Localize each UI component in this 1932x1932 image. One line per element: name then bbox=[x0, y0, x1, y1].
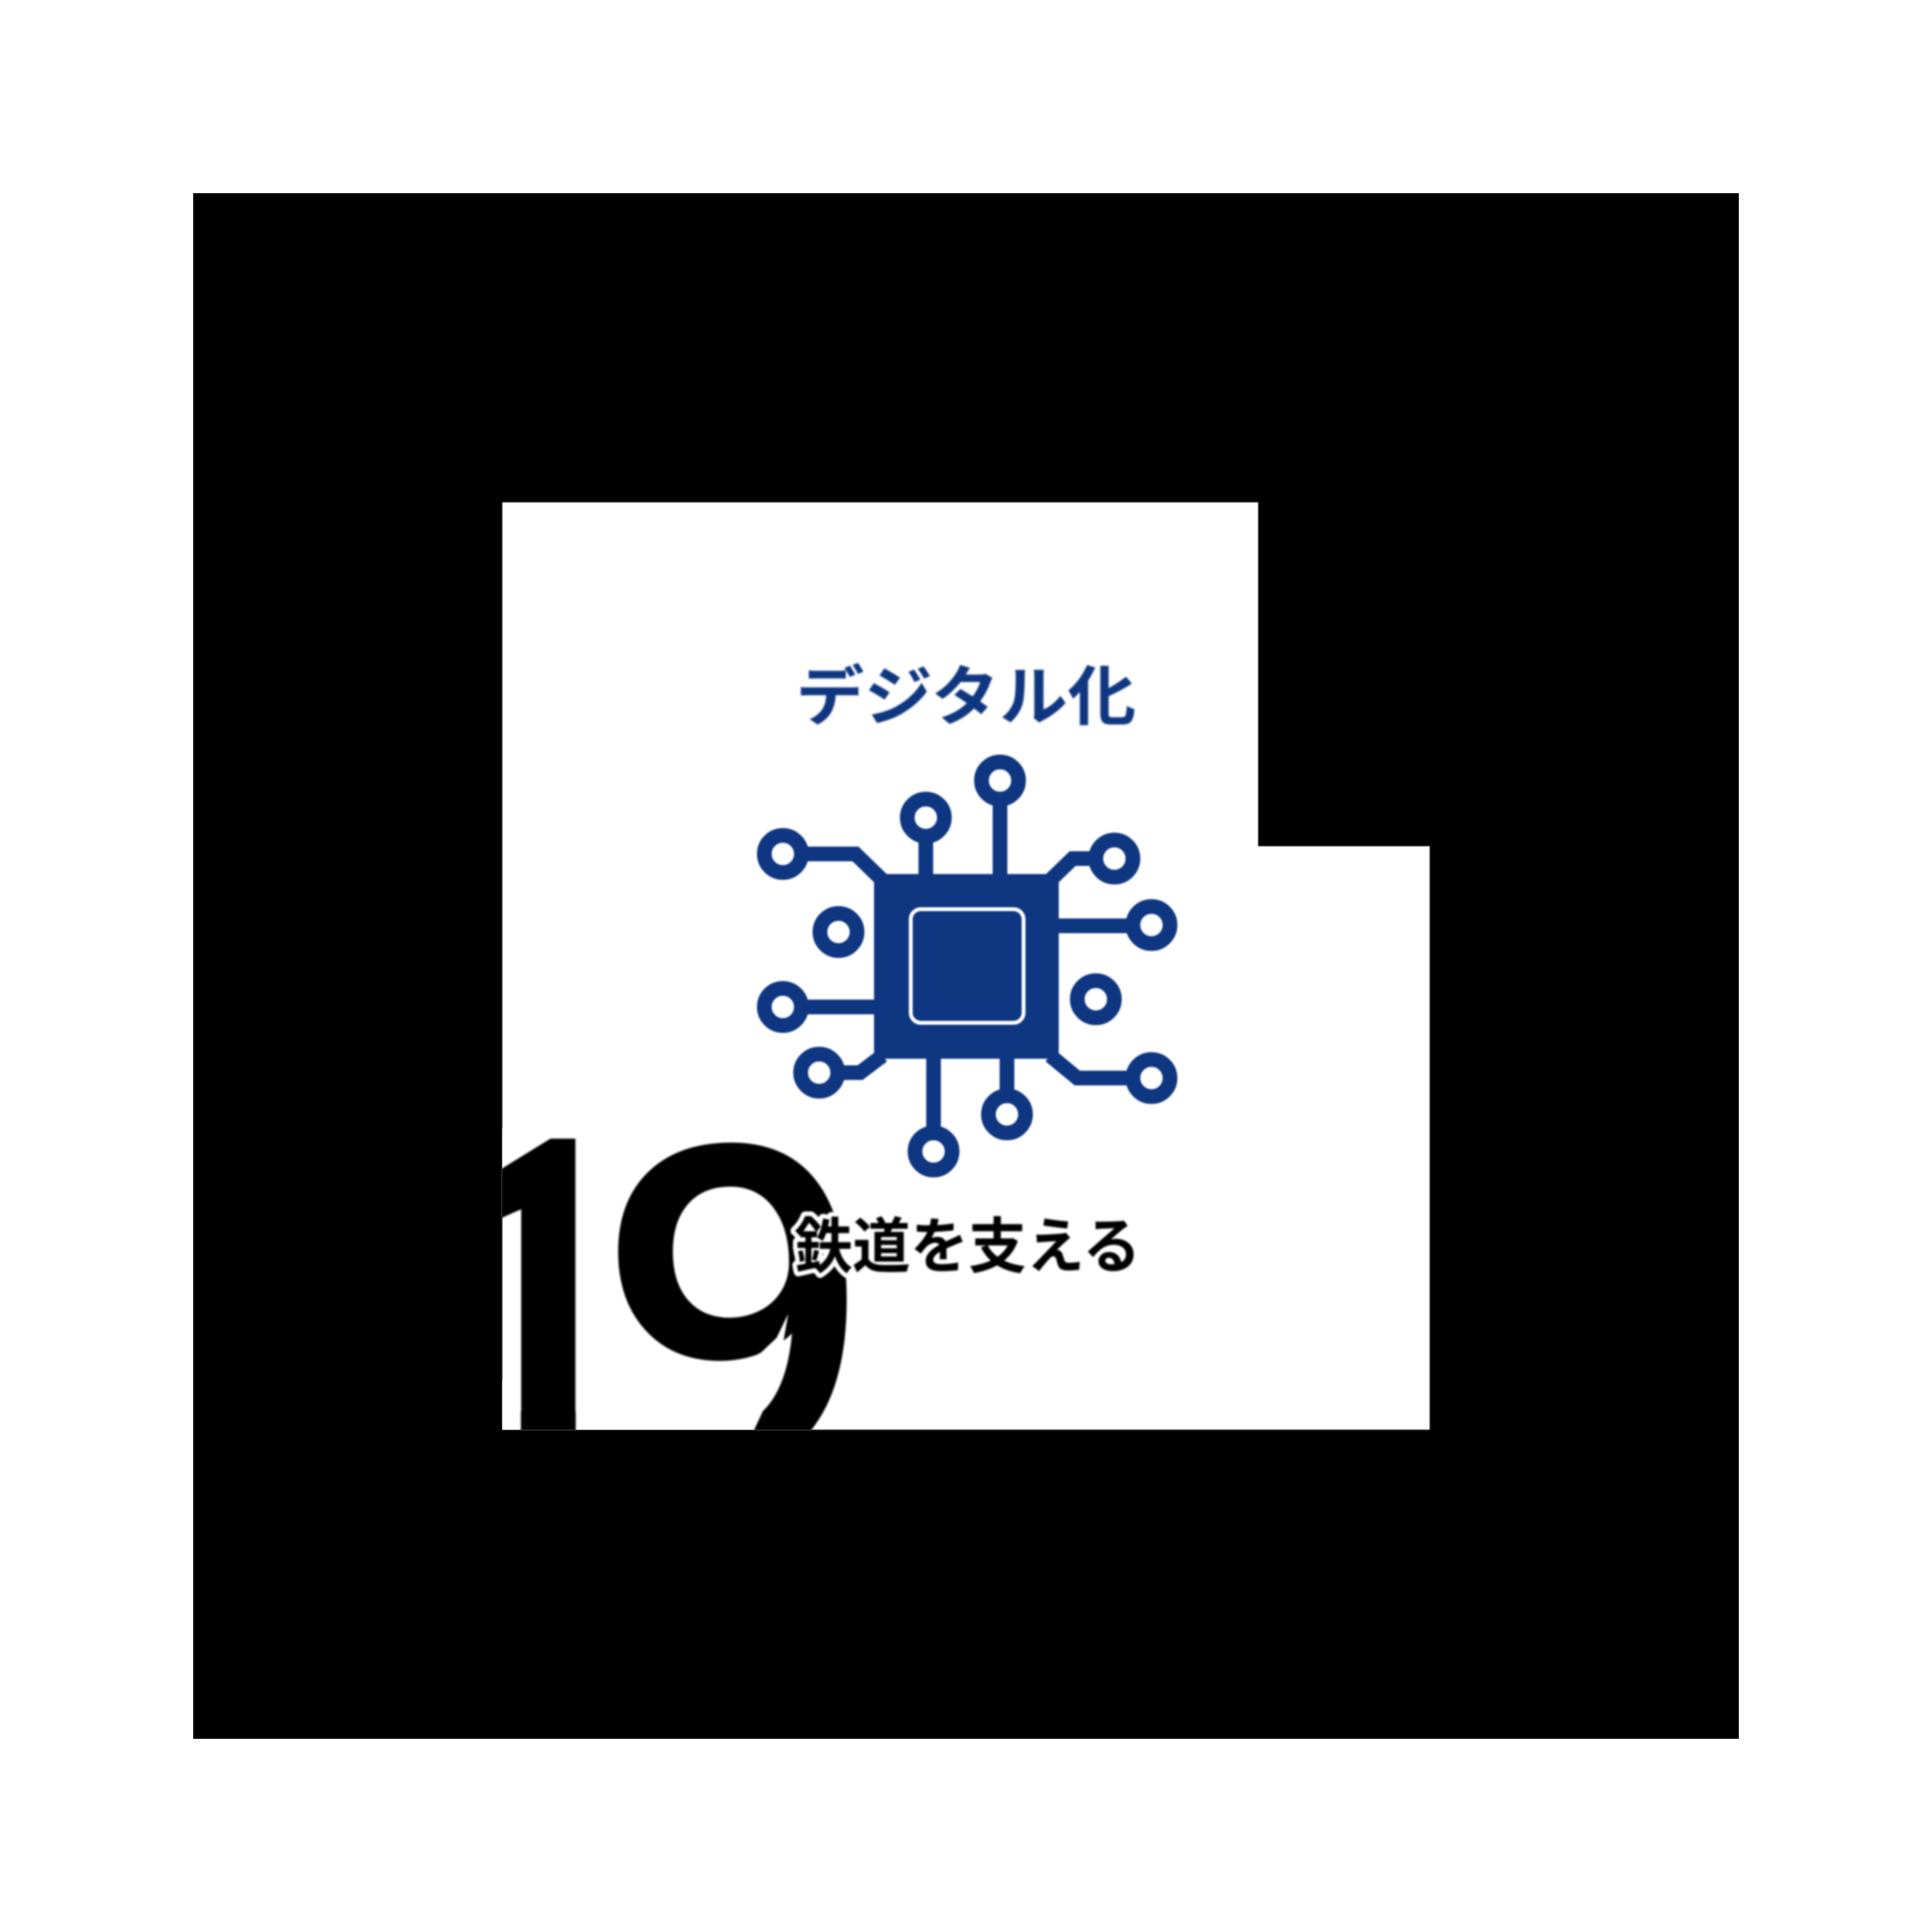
infographic canvas bbox=[193, 193, 1739, 1739]
black frame panel bbox=[193, 193, 1739, 1739]
large number 19: 9 bbox=[603, 1056, 862, 1553]
chip core outline bbox=[910, 909, 1023, 1023]
heading: digital transformation: デジタル化 bbox=[796, 645, 1136, 739]
circuit nodes bbox=[764, 762, 1170, 1170]
icon: circuit chip bbox=[764, 762, 1170, 1170]
large number 19: 1 bbox=[410, 1048, 670, 1545]
chip body bbox=[874, 874, 1059, 1059]
subtitle with white halo: 鉄道を支える bbox=[794, 1199, 1141, 1285]
large number 19 bbox=[502, 1127, 849, 1430]
circuit traces bbox=[783, 781, 1151, 1151]
white stepped content panel bbox=[502, 502, 1430, 1430]
